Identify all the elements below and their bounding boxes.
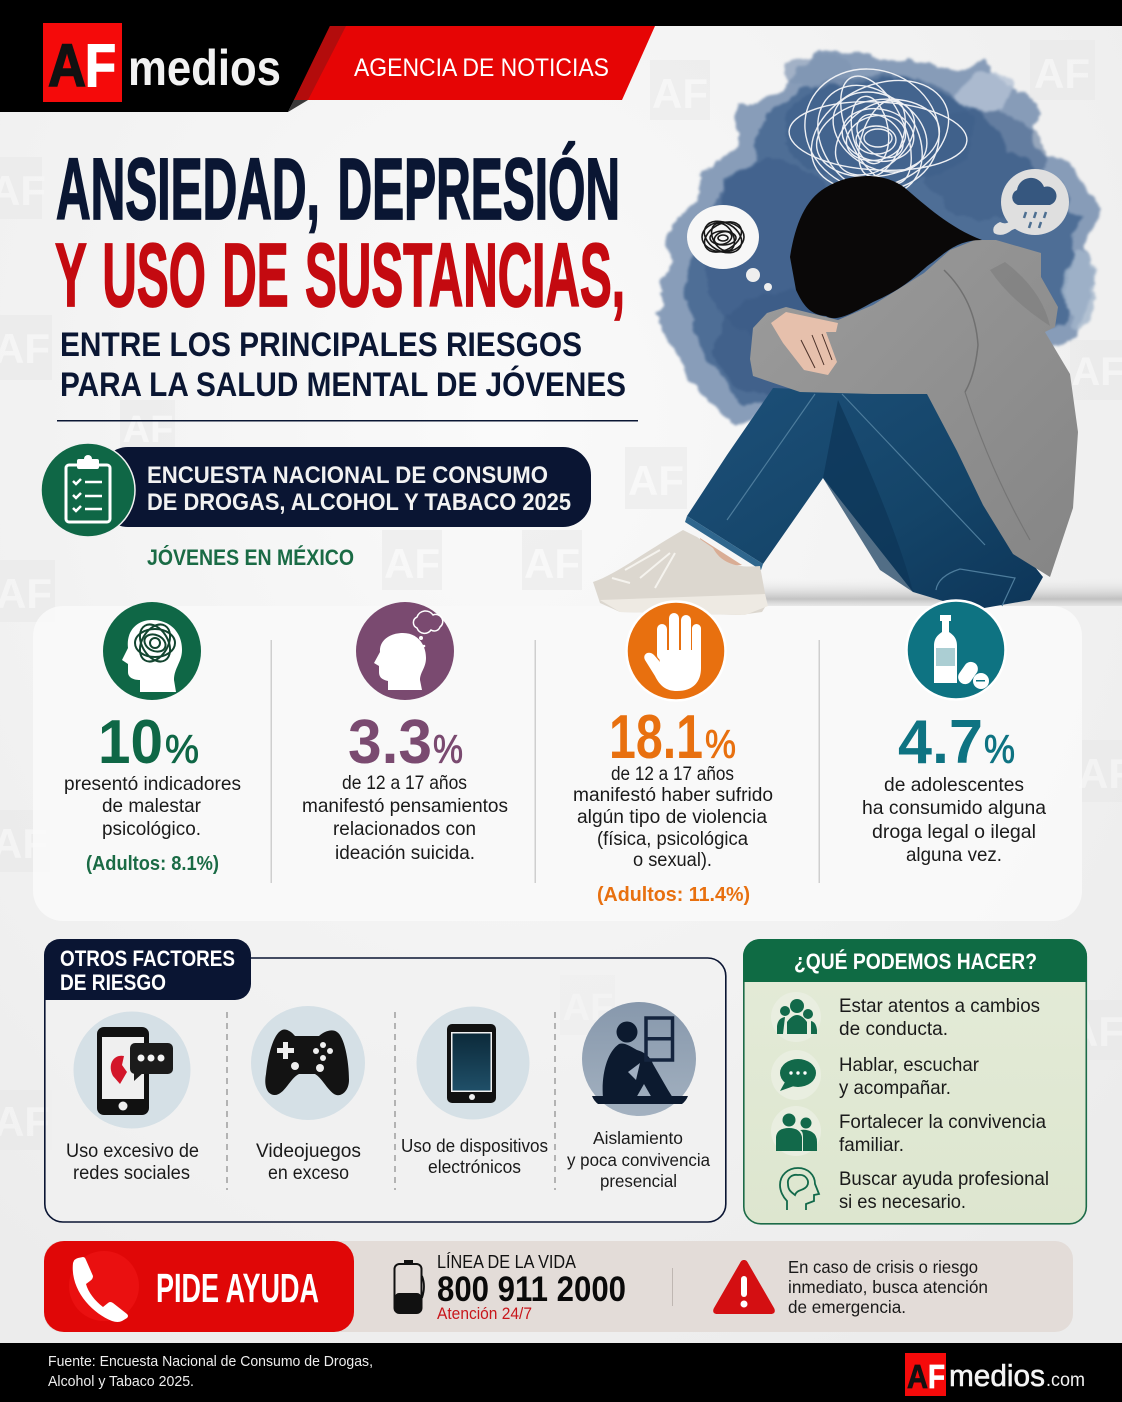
stat: 18.1% violencia: manifestó haber sufrido (573, 785, 773, 806)
header bar (0, 0, 1122, 112)
factor: aislamiento: Aislamiento (593, 1128, 683, 1148)
action: hablar y escuchar (771, 1050, 979, 1100)
icon: bottle and pills (906, 600, 1006, 700)
button: pide ayuda (44, 1241, 354, 1332)
stat: 4.7% consumo de drogas: droga legal o ilegal (872, 821, 1036, 843)
shoe (593, 530, 768, 615)
watercolor cloud (656, 50, 1099, 425)
survey banner: ENCUESTA NACIONAL DE CONSUMO (147, 462, 548, 489)
help bar (44, 1241, 1073, 1332)
factor: videojuegos (251, 1006, 365, 1184)
stat: 10% malestar psicológico: 10 (98, 708, 163, 777)
hair (790, 176, 982, 318)
banner: agencia de noticias (294, 26, 655, 100)
hand (771, 312, 838, 375)
icon: clipboard checklist (41, 443, 135, 537)
icon: speech bubble (771, 1050, 821, 1100)
action: convivencia familiar (771, 1106, 1046, 1156)
stat: 4.7% consumo de drogas: ha consumido alguna (862, 797, 1046, 819)
banner: agencia de noticias: AGENCIA DE NOTICIAS (354, 54, 609, 82)
emergency note: En caso de crisis o riesgo (788, 1257, 978, 1277)
stat: 3.3% ideación suicida: % (433, 728, 463, 772)
heading tab (44, 939, 251, 1000)
stat: 3.3% ideación suicida: manifestó pensamientos (302, 795, 508, 817)
heading (743, 939, 1087, 982)
hoodie (750, 240, 1078, 577)
action: convivencia familiar: familiar. (839, 1134, 904, 1156)
stat: 4.7% consumo de drogas: alguna vez. (906, 844, 1002, 866)
icon: isolated figure by window (582, 1002, 696, 1116)
logo AF medios (43, 23, 281, 102)
logo AF medios: medios (128, 40, 281, 96)
stat: 10% malestar psicológico (64, 602, 241, 875)
panel: qué podemos hacer (743, 939, 1087, 1224)
text: AF (123, 409, 173, 451)
survey banner (41, 443, 591, 537)
icon: head with tangled brain (103, 602, 201, 700)
factor: redes sociales: redes sociales (73, 1163, 190, 1184)
stat: 18.1% violencia: % (705, 723, 736, 767)
icon: game controller (251, 1006, 365, 1120)
thought bubble: rain cloud (993, 169, 1069, 235)
factor: videojuegos: Videojuegos (256, 1141, 361, 1162)
stat: 3.3% ideación suicida (302, 602, 508, 864)
icon: group of people (771, 992, 821, 1042)
icon: two people (771, 1106, 821, 1156)
heading tab: OTROS FACTORES (60, 946, 235, 971)
factor: dispositivos electrónicos: Uso de dispositivos (401, 1136, 548, 1156)
stat: 18.1% violencia: algún tipo de violencia (577, 807, 767, 828)
title: ANSIEDAD, DEPRESIÓN (56, 141, 620, 238)
floor shadow (762, 578, 1122, 606)
survey banner: DE DROGAS, ALCOHOL Y TABACO 2025 (147, 489, 571, 516)
action: cambios de conducta: Estar atentos a cambios (839, 995, 1040, 1017)
jeans (685, 388, 1043, 610)
factor: aislamiento: y poca convivencia (567, 1150, 710, 1170)
action: hablar y escuchar: y acompañar. (839, 1077, 951, 1099)
logo AF medios: F (85, 32, 116, 99)
footer logo: .com (1046, 1370, 1085, 1391)
action: cambios de conducta: de conducta. (839, 1018, 948, 1040)
stat: 4.7% consumo de drogas: % (984, 728, 1015, 772)
stat: 10% malestar psicológico: (Adultos: 8.1%) (86, 853, 219, 875)
emergency note: inmediato, busca atención (788, 1277, 988, 1297)
subtitle: PARA LA SALUD MENTAL DE JÓVENES (60, 366, 626, 404)
heading: ¿QUÉ PODEMOS HACER? (794, 949, 1037, 974)
action: hablar y escuchar: Hablar, escuchar (839, 1054, 979, 1076)
stat: 10% malestar psicológico: % (165, 728, 199, 772)
stat: 4.7% consumo de drogas: de adolescentes (884, 774, 1024, 796)
title (55, 141, 625, 326)
factor: videojuegos: en exceso (268, 1163, 349, 1184)
white scribble (787, 50, 969, 216)
stat: 3.3% ideación suicida: relacionados con (333, 818, 476, 840)
stat: 4.7% consumo de drogas: 4.7 (898, 708, 983, 777)
thought bubble: scribble (687, 205, 772, 291)
stat: 18.1% violencia: (física, psicológica (597, 829, 748, 850)
factor: aislamiento (567, 1002, 710, 1191)
illustration: young person with anxiety (593, 50, 1122, 615)
icon: raised hand (626, 602, 726, 700)
stat: 10% malestar psicológico: de malestar (102, 795, 201, 817)
stat: 3.3% ideación suicida: ideación suicida. (335, 842, 475, 864)
factor: dispositivos electrónicos: electrónicos (428, 1157, 521, 1177)
footer (0, 1343, 1122, 1402)
source note: Fuente: Encuesta Nacional de Consumo de Drogas, (48, 1353, 373, 1370)
action: ayuda profesional: si es necesario. (839, 1191, 966, 1213)
source note: Alcohol y Tabaco 2025. (48, 1373, 194, 1390)
panel: statistics background (33, 606, 1082, 921)
stat: 3.3% ideación suicida: de 12 a 17 años (342, 772, 467, 794)
icon: phone with chat bubble (74, 1012, 190, 1128)
text: AF (1034, 50, 1090, 97)
panel: otros factores de riesgo (44, 939, 726, 1222)
title: Y USO DE SUSTANCIAS, (55, 226, 625, 326)
statistics columns (64, 600, 1046, 906)
action: ayuda profesional: Buscar ayuda profesional (839, 1168, 1049, 1190)
stat: 18.1% violencia (573, 602, 773, 906)
text: AF (524, 540, 580, 587)
emergency note: de emergencia. (788, 1297, 906, 1317)
logo AF medios: A (48, 32, 86, 99)
text: AF (563, 987, 613, 1029)
action: convivencia familiar: Fortalecer la convivencia (839, 1111, 1046, 1133)
factor: dispositivos electrónicos (401, 1006, 548, 1177)
source note (48, 1353, 373, 1390)
icon: smartphone (416, 1006, 530, 1120)
stat: 18.1% violencia: 18.1 (609, 703, 703, 772)
button: pide ayuda: PIDE AYUDA (156, 1265, 319, 1311)
subtitle: ENTRE LOS PRINCIPALES RIESGOS (60, 326, 582, 364)
factor: redes sociales (66, 1012, 199, 1184)
action: cambios de conducta (771, 992, 1040, 1042)
label: jóvenes en méxico: JÓVENES EN MÉXICO (147, 545, 354, 570)
stat: 10% malestar psicológico: presentó indicadores (64, 773, 241, 795)
stat: 4.7% consumo de drogas (862, 600, 1046, 866)
text: AF (652, 70, 708, 117)
icon: telephone (73, 1257, 128, 1322)
stat: 18.1% violencia: de 12 a 17 años (611, 764, 734, 785)
hotline: Atención 24/7 (437, 1305, 532, 1323)
stat: 18.1% violencia: (Adultos: 11.4%) (597, 884, 750, 906)
subtitle (60, 326, 626, 404)
hotline: LÍNEA DE LA VIDA (437, 1252, 576, 1272)
icon: warning triangle (713, 1260, 775, 1314)
factor: redes sociales: Uso excesivo de (66, 1141, 199, 1162)
icon: head with thought cloud (356, 602, 454, 700)
hotline: 800 911 2000 (437, 1270, 626, 1309)
factor: aislamiento: presencial (600, 1171, 677, 1191)
stat: 10% malestar psicológico: psicológico. (102, 818, 201, 840)
text: AF (384, 540, 440, 587)
action: ayuda profesional (780, 1168, 1049, 1213)
footer logo (905, 1353, 1085, 1396)
stat: 18.1% violencia: o sexual). (633, 850, 712, 871)
footer logo: F (928, 1358, 945, 1395)
heading tab: DE RIESGO (60, 970, 166, 995)
hotline (437, 1252, 626, 1323)
footer logo: A (907, 1358, 928, 1395)
icon: head with brain outline (780, 1168, 819, 1210)
icon: phone battery (394, 1260, 424, 1313)
stat: 3.3% ideación suicida: 3.3 (348, 708, 432, 777)
emergency note (788, 1257, 988, 1317)
footer logo: medios (949, 1358, 1045, 1393)
text: AF (628, 457, 684, 504)
